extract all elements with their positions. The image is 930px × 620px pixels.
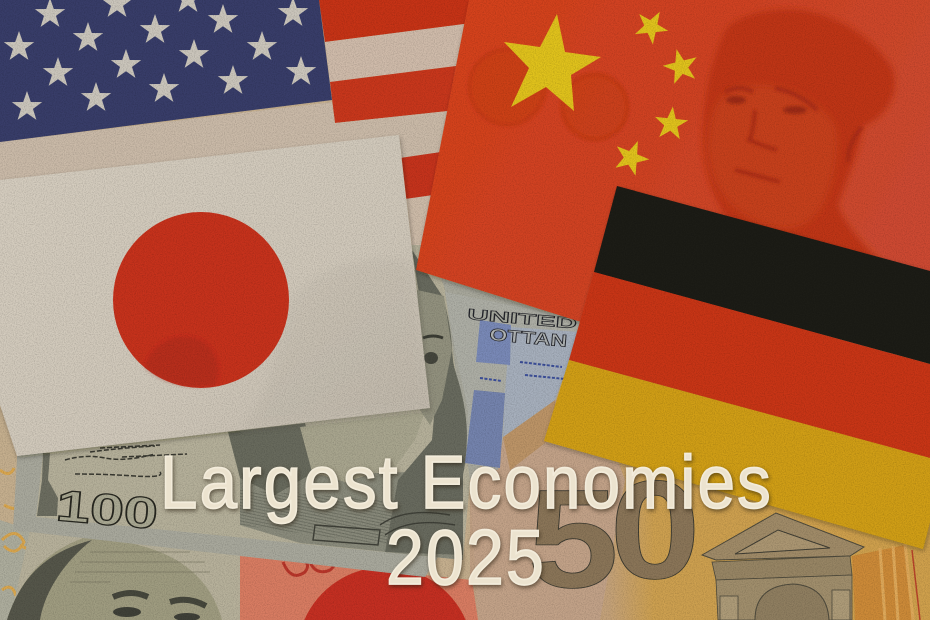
vignette at left end: [37, 453, 58, 516]
dollar portrait engraving: [228, 250, 467, 560]
flag: Germany: [544, 186, 930, 549]
blue security panel: OTTAN: [489, 325, 568, 351]
stripes: [0, 0, 470, 245]
flag: Japan: [0, 135, 430, 456]
icon: small yellow stars: [609, 3, 702, 178]
canton with stars: [0, 0, 332, 142]
red yuan banknote: [238, 556, 478, 620]
banknote: 100 dollar bill: [13, 240, 585, 577]
orange engraving strip: [852, 544, 920, 620]
flag: China with portrait: [416, 0, 930, 340]
handwriting engraving: [65, 445, 187, 476]
euro note numerals 50: 0: [610, 452, 701, 608]
banknote: lower Franklin portrait: [7, 530, 240, 620]
blue security panel: UNITED: [467, 306, 578, 333]
icon: classical temple on euro note: [702, 513, 864, 620]
euro banknote: [470, 400, 930, 620]
icon: large yellow star: [504, 14, 601, 111]
blue security panel: [445, 292, 585, 470]
100 numeral: 100: [54, 481, 160, 539]
icon: red sun disc: [113, 212, 289, 388]
euro note numerals 50: 5: [528, 461, 619, 617]
watermark portrait: [703, 10, 895, 262]
flag: United States: [0, 0, 470, 245]
title: 2025: [386, 513, 546, 601]
title: [160, 440, 773, 601]
watermark rings 50: [469, 49, 628, 140]
ghost banknote shading: [240, 259, 430, 430]
title: Largest Economies: [160, 440, 773, 524]
